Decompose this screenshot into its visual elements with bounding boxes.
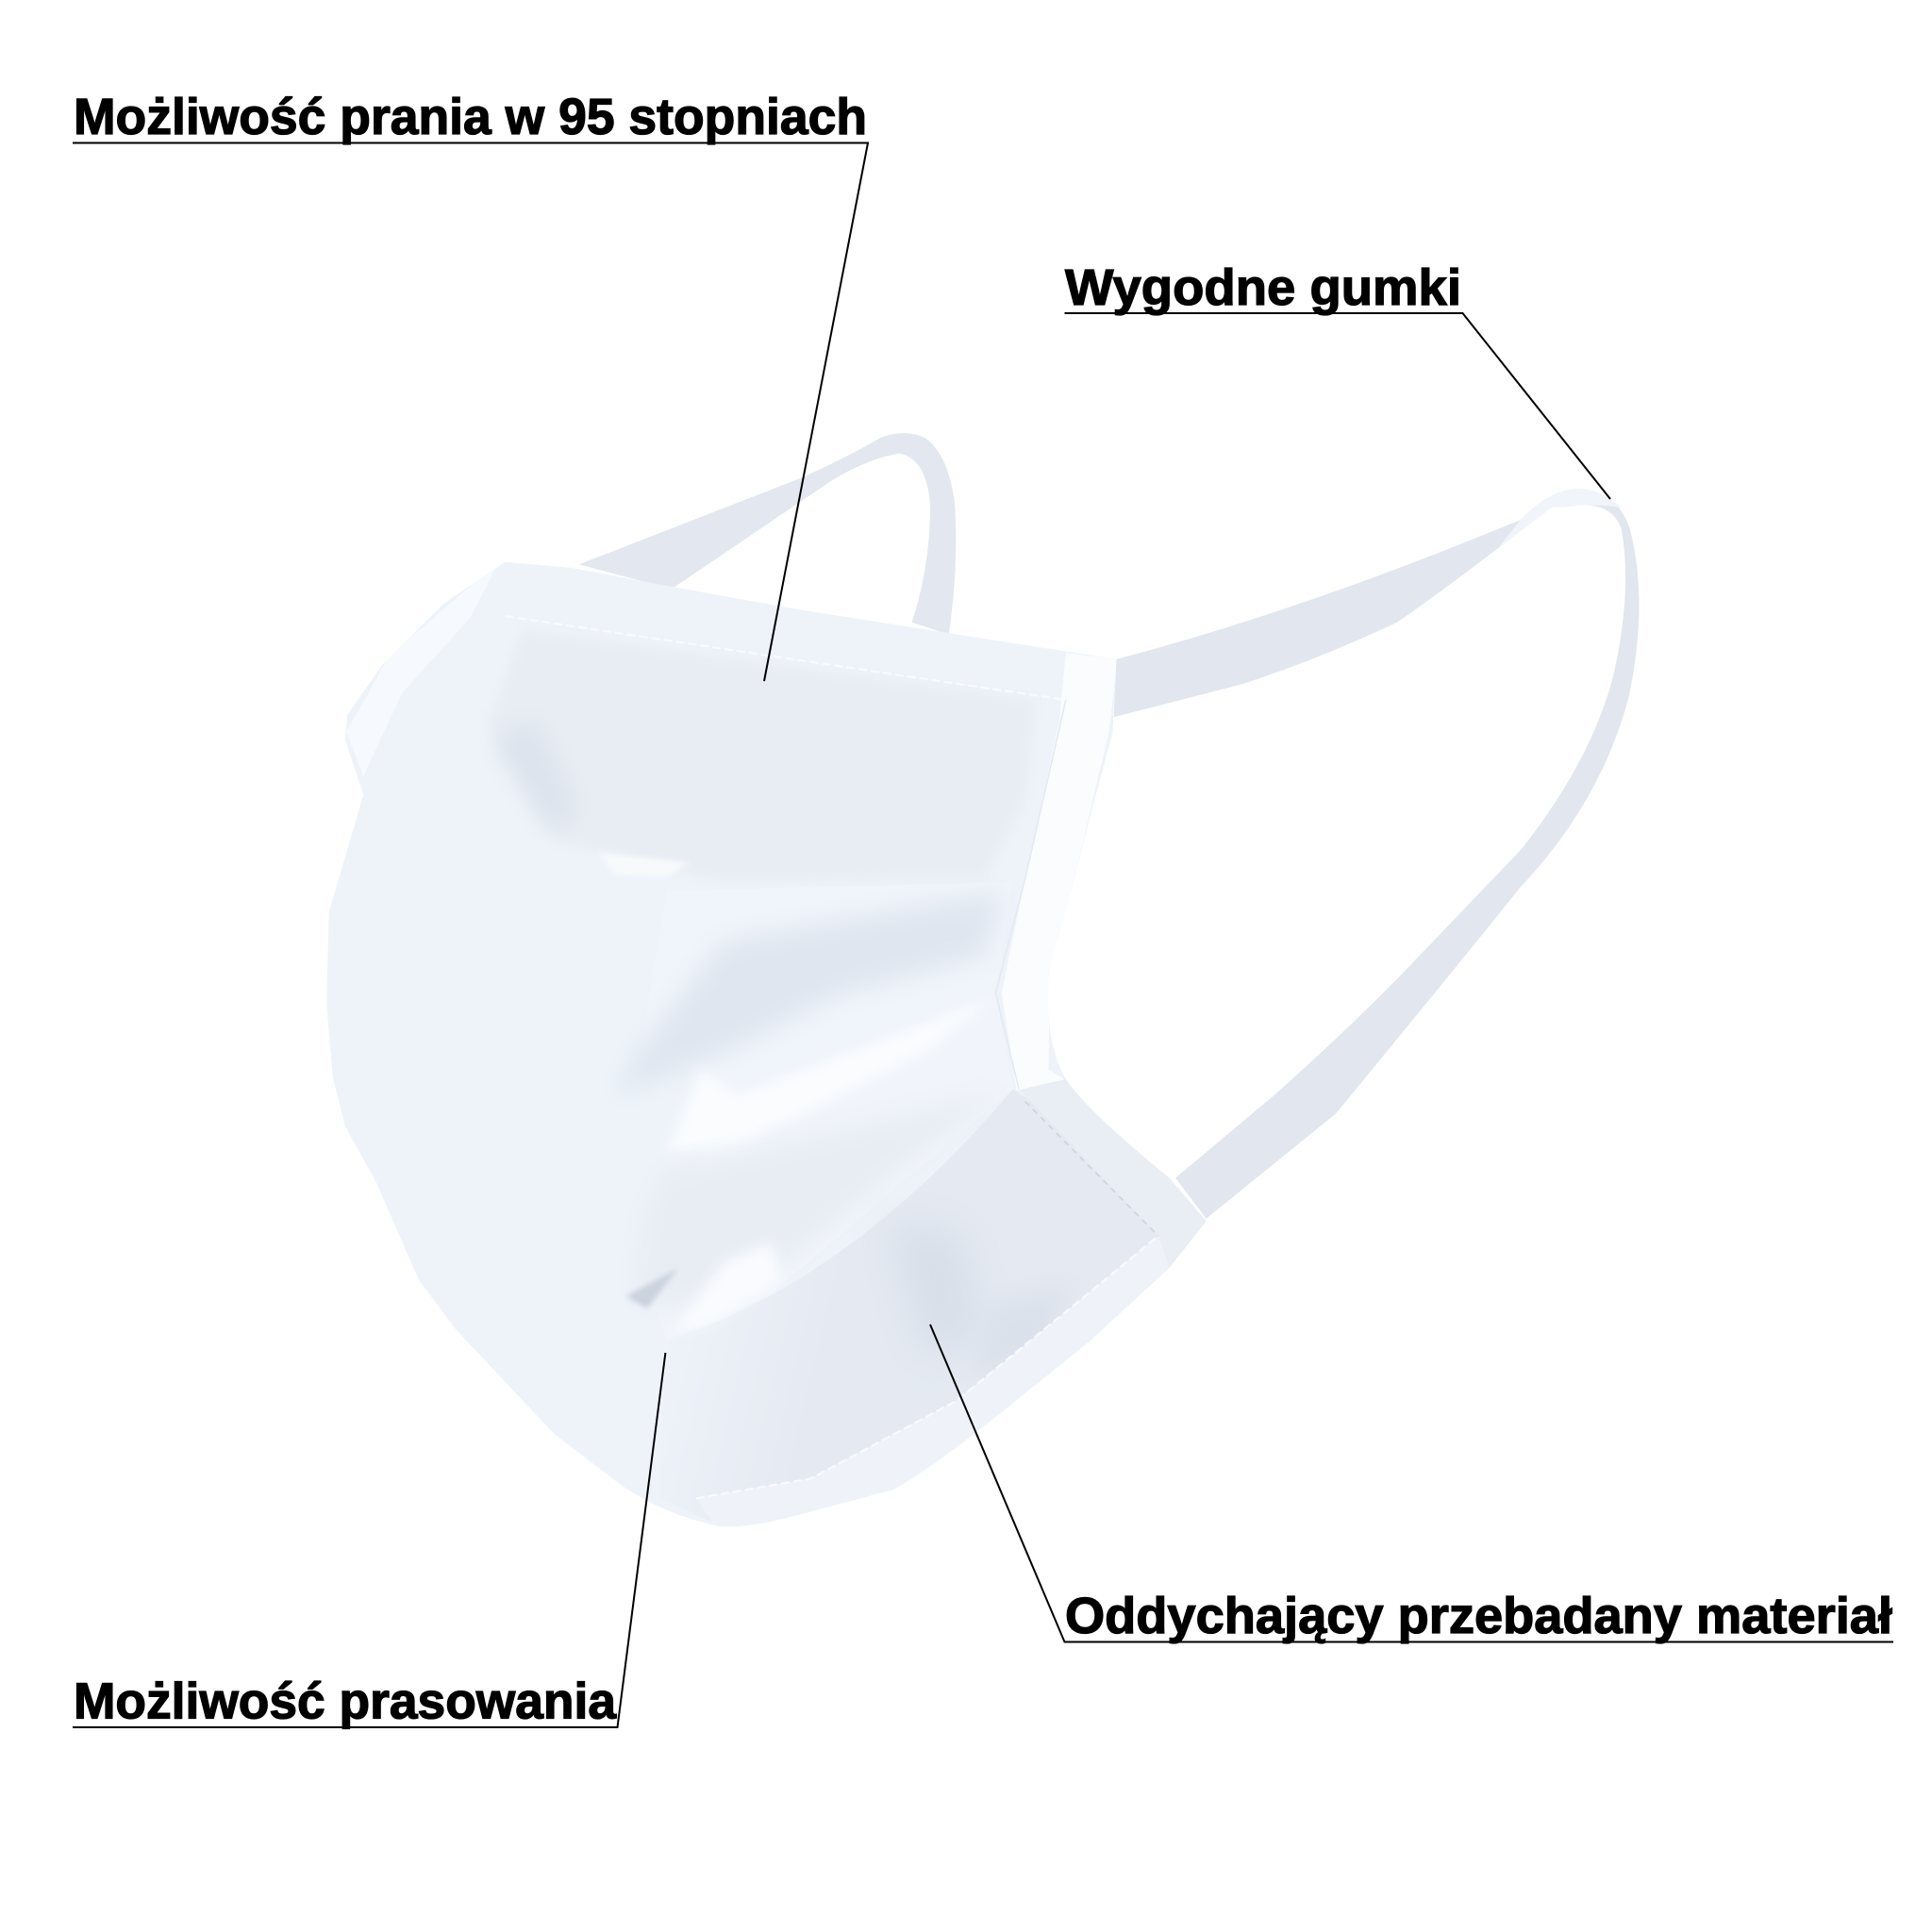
strap highlight at loop	[1497, 489, 1622, 550]
lower fold shading	[653, 1130, 919, 1291]
label: Wygodne gumki	[1065, 260, 1461, 316]
label: Możliwość prania w 95 stopniach	[74, 90, 867, 145]
crease highlight	[692, 1245, 777, 1319]
warm glow below shading	[604, 855, 685, 875]
middle fold shading	[632, 896, 995, 1080]
illustration: white fabric mask	[308, 433, 1639, 1541]
lower edge band	[747, 1236, 1170, 1521]
callout: breathable tested material	[930, 1324, 1893, 1644]
lower stitching	[696, 1236, 1158, 1498]
callout: comfortable elastics	[1064, 260, 1610, 499]
crease dark wedge	[626, 1270, 675, 1309]
lower panel	[775, 1090, 1158, 1484]
diagram: face mask with callouts	[73, 96, 1893, 1730]
leader line	[1064, 313, 1610, 499]
below crease light area	[641, 882, 1013, 1095]
lower panel side shadow	[1000, 1304, 1049, 1357]
top panel shading	[488, 629, 1036, 882]
callout: ironable	[73, 1353, 665, 1730]
top panel dark corner	[508, 736, 563, 815]
highlight in middle fold	[675, 1030, 938, 1149]
label: Oddychający przebadany materiał	[1065, 1589, 1892, 1644]
label: Możliwość prasowania	[74, 1674, 617, 1730]
callout: washable at 95 degrees	[73, 90, 868, 681]
white binding on right edge	[1002, 653, 1118, 1091]
leader line	[73, 1353, 665, 1727]
chin stitching	[1025, 1102, 1158, 1236]
mask body	[308, 542, 1232, 1541]
right ear strap	[1114, 489, 1639, 1219]
left edge strip	[346, 562, 499, 776]
top stitching	[506, 616, 1066, 700]
chin corner fold	[1019, 1077, 1207, 1268]
right stitching	[995, 700, 1066, 1090]
left ear strap	[579, 433, 956, 635]
fold band under dark crease	[641, 993, 1013, 1341]
leader line	[930, 1324, 1893, 1641]
lower panel dark patch	[904, 1234, 972, 1341]
leader line	[73, 143, 868, 681]
